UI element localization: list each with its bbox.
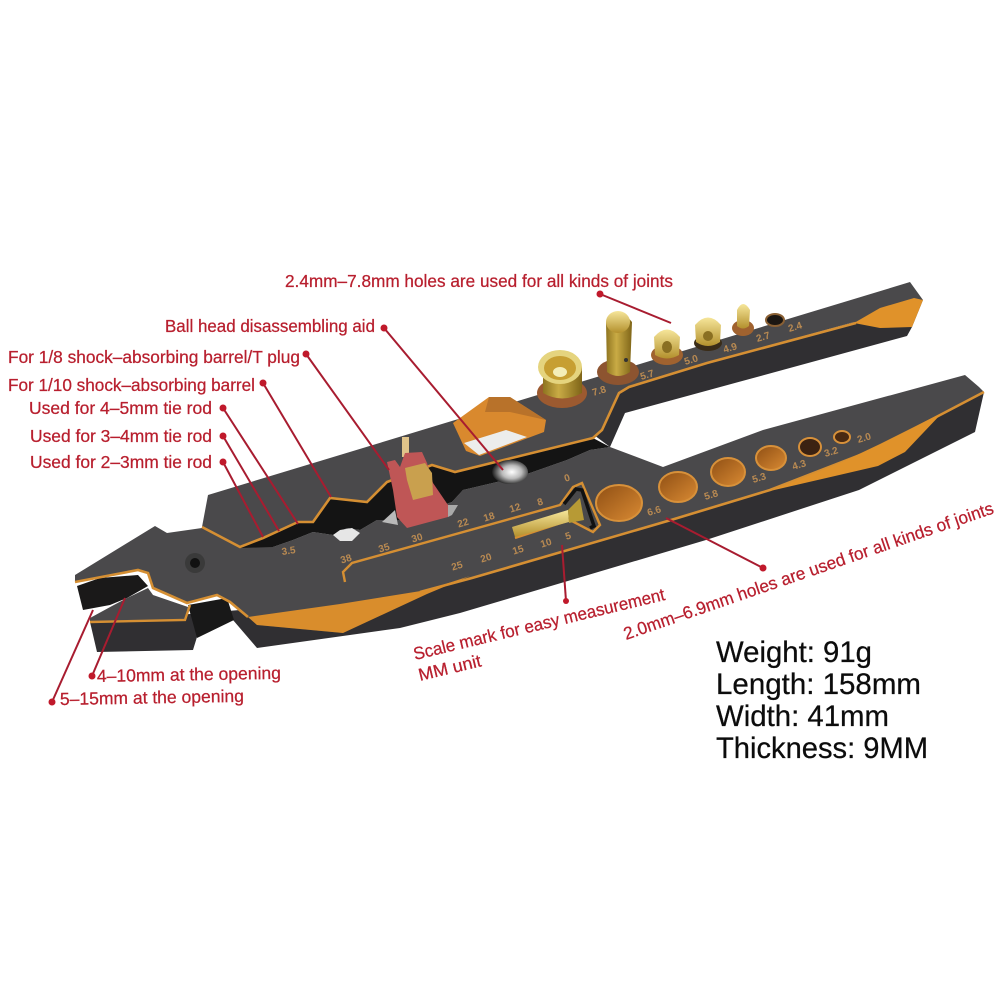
engraved scale numbers: 2.0 [856,431,873,446]
engraved scale numbers: 0 [563,472,572,485]
callout: scale mark [411,545,667,685]
engraved scale numbers: 5.7 [639,368,656,383]
callout: 4–10mm opening [88,598,281,686]
engraved scale numbers: 12 [508,502,523,515]
callout: 2.4–7.8mm holes: 2.4mm–7.8mm holes are used for all kinds of joints [285,271,673,291]
lower right orange wedge [770,413,942,491]
upper connectors [537,304,784,408]
gap between handles [240,438,610,548]
engraved scale numbers: 38 [339,553,354,566]
connector 7.8mm [537,350,587,408]
specifications: Thickness: 9MM [716,732,928,765]
engraved scale numbers: 4.9 [722,341,739,356]
engraved scale numbers: 35 [377,542,392,555]
slot black groove [564,489,594,528]
specifications: Weight: 91g [716,636,872,669]
callout: scale mark: Scale mark for easy measurement [411,584,667,664]
lower handle face [75,375,984,633]
engraved scale numbers: 2.7 [755,330,772,345]
callout: 1/10 barrel: For 1/10 shock–absorbing barrel [8,375,255,395]
callout: 1/8 barrel [8,347,389,470]
engraved scale numbers: 30 [410,532,425,545]
connector 7.0mm [597,311,639,385]
pliers tool [75,282,984,652]
engraved scale numbers: 10 [539,537,554,550]
lower handle side wall [90,392,984,652]
hole 2.7mm [766,314,784,326]
callout: 5–15mm opening: 5–15mm at the opening [60,686,244,709]
engraved scale numbers: 5.0 [683,353,700,368]
callout: 4–5mm tie rod [29,398,298,524]
jaw mouth [77,575,148,610]
brass screw [512,498,584,537]
engraved scale numbers: 7.8 [591,384,608,399]
callout: 4–5mm tie rod: Used for 4–5mm tie rod [29,398,212,418]
engraved scale numbers: 18 [482,511,497,524]
connector 5.7mm [651,330,683,365]
engraved scale numbers: 20 [479,552,494,565]
callout: 5–15mm opening [48,610,244,709]
lower jaw orange edge [90,605,190,622]
connector 5.0mm [694,318,722,351]
callout: 3–4mm tie rod [30,426,279,531]
callout: 2–3mm tie rod: Used for 2–3mm tie rod [30,452,212,472]
specifications [716,636,928,765]
lower left orange wedge [248,576,470,633]
callout: scale mark: MM unit [416,650,483,685]
upper orange wedge [854,298,923,328]
engraved scale numbers: 3.5 [281,545,297,558]
light through gap [333,528,360,541]
lower handle orange edge [75,570,248,617]
jaw notch shadow [188,598,234,638]
engraved scale numbers: 5.3 [751,471,768,486]
light right of plug [448,505,458,517]
engraved scale numbers: 15 [511,544,526,557]
engraved scale numbers: 4.3 [791,458,808,473]
upper handle face [202,282,923,547]
scale slot edge [343,483,600,582]
specifications: Width: 41mm [716,700,889,733]
engraved scale numbers: 2.4 [787,320,804,335]
callout: 1/10 barrel [8,375,331,497]
engraved scale numbers [281,320,873,573]
square opening [453,397,546,456]
pivot screw [185,553,205,573]
light left of plug [382,510,398,525]
engraved scale numbers: 22 [456,517,471,530]
callout: 1/8 barrel: For 1/8 shock–absorbing barrel/T plug [8,347,300,367]
callout: 4–10mm opening: 4–10mm at the opening [97,663,281,686]
engraved scale numbers: 6.6 [646,504,663,519]
callout: ball head: Ball head disassembling aid [165,316,375,336]
T plug [387,437,448,528]
connector 4.0mm [732,304,754,336]
specifications: Length: 158mm [716,668,921,701]
engraved scale numbers: 25 [450,560,465,573]
lower holes [596,431,850,521]
lower jaw face [90,588,188,622]
engraved scale numbers: 8 [536,496,545,509]
callout: 2.4–7.8mm holes [285,271,673,323]
callout: 3–4mm tie rod: Used for 3–4mm tie rod [30,426,212,446]
engraved scale numbers: 3.2 [823,445,840,460]
ball head [492,460,528,484]
upper handle orange edge [202,323,856,547]
callout: ball head [165,316,503,470]
callout: 2–3mm tie rod [30,452,263,537]
upper handle side wall [594,322,912,447]
callout: 2.0–6.9mm holes: 2.0mm–6.9mm holes are used for all kinds of joints [621,498,996,644]
lower thin orange edge [420,392,984,592]
engraved scale numbers: 5.8 [703,488,720,503]
engraved scale numbers: 5 [564,530,573,543]
